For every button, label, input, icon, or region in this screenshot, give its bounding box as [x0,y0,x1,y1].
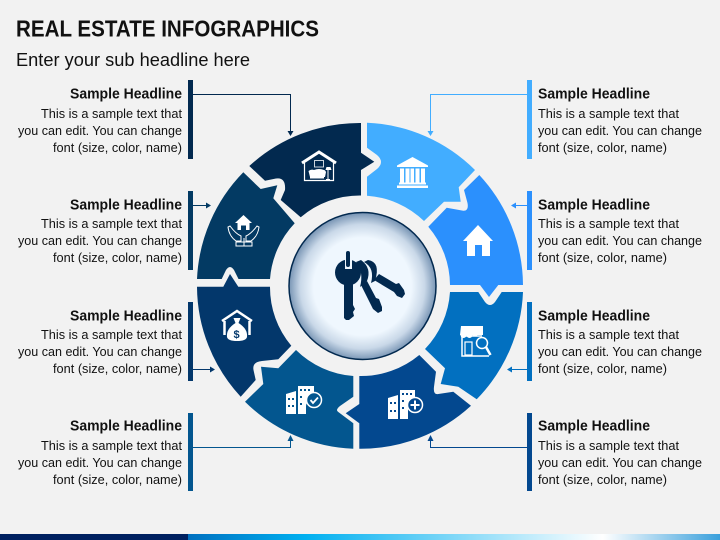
heading: Sample Headline [538,198,650,214]
body text [538,327,702,376]
text block: right 4 [538,419,702,487]
body text [538,216,702,265]
body text: font (size, color, name) [538,250,667,265]
text block: left 3 [18,309,182,376]
footer bar: gradient [188,534,720,540]
body text: you can edit. You can change [538,233,702,248]
text block: right 1 [538,87,702,155]
heading: Sample Headline [538,419,650,435]
body text [538,106,702,155]
heading: Sample Headline [538,87,650,103]
body text: you can edit. You can change [18,344,182,359]
heading: Sample Headline [538,309,650,325]
arrow: left 2 [193,202,211,208]
body text: font (size, color, name) [538,140,667,155]
heading: Sample Headline [70,198,182,214]
body text: font (size, color, name) [538,361,667,376]
arrow: right 4 [428,435,527,448]
ring segment: lower left [197,274,291,397]
text block: left 2 [18,198,182,265]
heading: Sample Headline [70,87,182,103]
body text [18,327,182,376]
body text: This is a sample text that [41,438,182,453]
body text [18,216,182,265]
body text: you can edit. You can change [538,123,702,138]
body text: This is a sample text that [538,106,679,121]
ring segment: top left [249,123,374,217]
ring segment: bottom right [346,355,471,449]
body text: This is a sample text that [41,216,182,231]
icon: house with money bag: $ [234,329,240,341]
ring segment: upper right [428,175,523,297]
icon: shop with magnifier [460,326,490,356]
icon: house with money bag [222,311,252,341]
arrow: right 3 [507,366,527,372]
body text: font (size, color, name) [53,140,182,155]
arrow: left 4 [193,435,294,448]
accent bar: right 4 [527,413,532,491]
icon: buildings with plus [388,390,422,419]
text block: right 2 [538,198,702,265]
heading: Sample Headline [70,309,182,325]
accent bar: right 1 [527,80,532,159]
text block: right 3 [538,309,702,376]
ring segment: upper left [197,172,295,279]
body text: font (size, color, name) [53,361,182,376]
body text: This is a sample text that [538,216,679,231]
arrow: right 2 [511,202,527,208]
body text: This is a sample text that [538,438,679,453]
accent bar: left 3 [188,302,193,381]
text block: left 1 [18,87,182,155]
body text: you can edit. You can change [538,344,702,359]
body text: This is a sample text that [41,106,182,121]
icon: bank [397,157,428,188]
arrow: right 1 [428,94,527,136]
ring segment: lower right [425,292,523,399]
accent bar: left 4 [188,413,193,491]
title: REAL ESTATE INFOGRAPHICS [16,16,319,42]
body text [18,438,182,487]
accent bar: right 2 [527,191,532,270]
body text [18,106,182,155]
body text: This is a sample text that [538,327,679,342]
body text: font (size, color, name) [53,250,182,265]
body text: This is a sample text that [41,327,182,342]
body text: you can edit. You can change [18,123,182,138]
accent bar: left 2 [188,191,193,270]
subtitle: Enter your sub headline here [16,50,250,70]
body text: font (size, color, name) [538,472,667,487]
ring segment: bottom left [245,350,353,449]
icon: white house [463,225,493,256]
arrow: left 1 [193,94,294,136]
body text [538,438,702,487]
icon: buildings with check [286,386,322,414]
icon: keys [335,251,405,320]
accent bar: right 3 [527,302,532,381]
body text: you can edit. You can change [18,455,182,470]
icon: house with sofa [302,152,336,180]
arrow: left 3 [193,366,215,372]
icon: house in hands [228,215,259,246]
accent bar: left 1 [188,80,193,159]
body text: you can edit. You can change [18,233,182,248]
center disc [289,212,436,360]
heading: Sample Headline [70,419,182,435]
footer bar: navy [0,534,188,540]
ring segment: top right [367,123,475,221]
body text: font (size, color, name) [53,472,182,487]
body text: you can edit. You can change [538,455,702,470]
text block: left 4 [18,419,182,487]
